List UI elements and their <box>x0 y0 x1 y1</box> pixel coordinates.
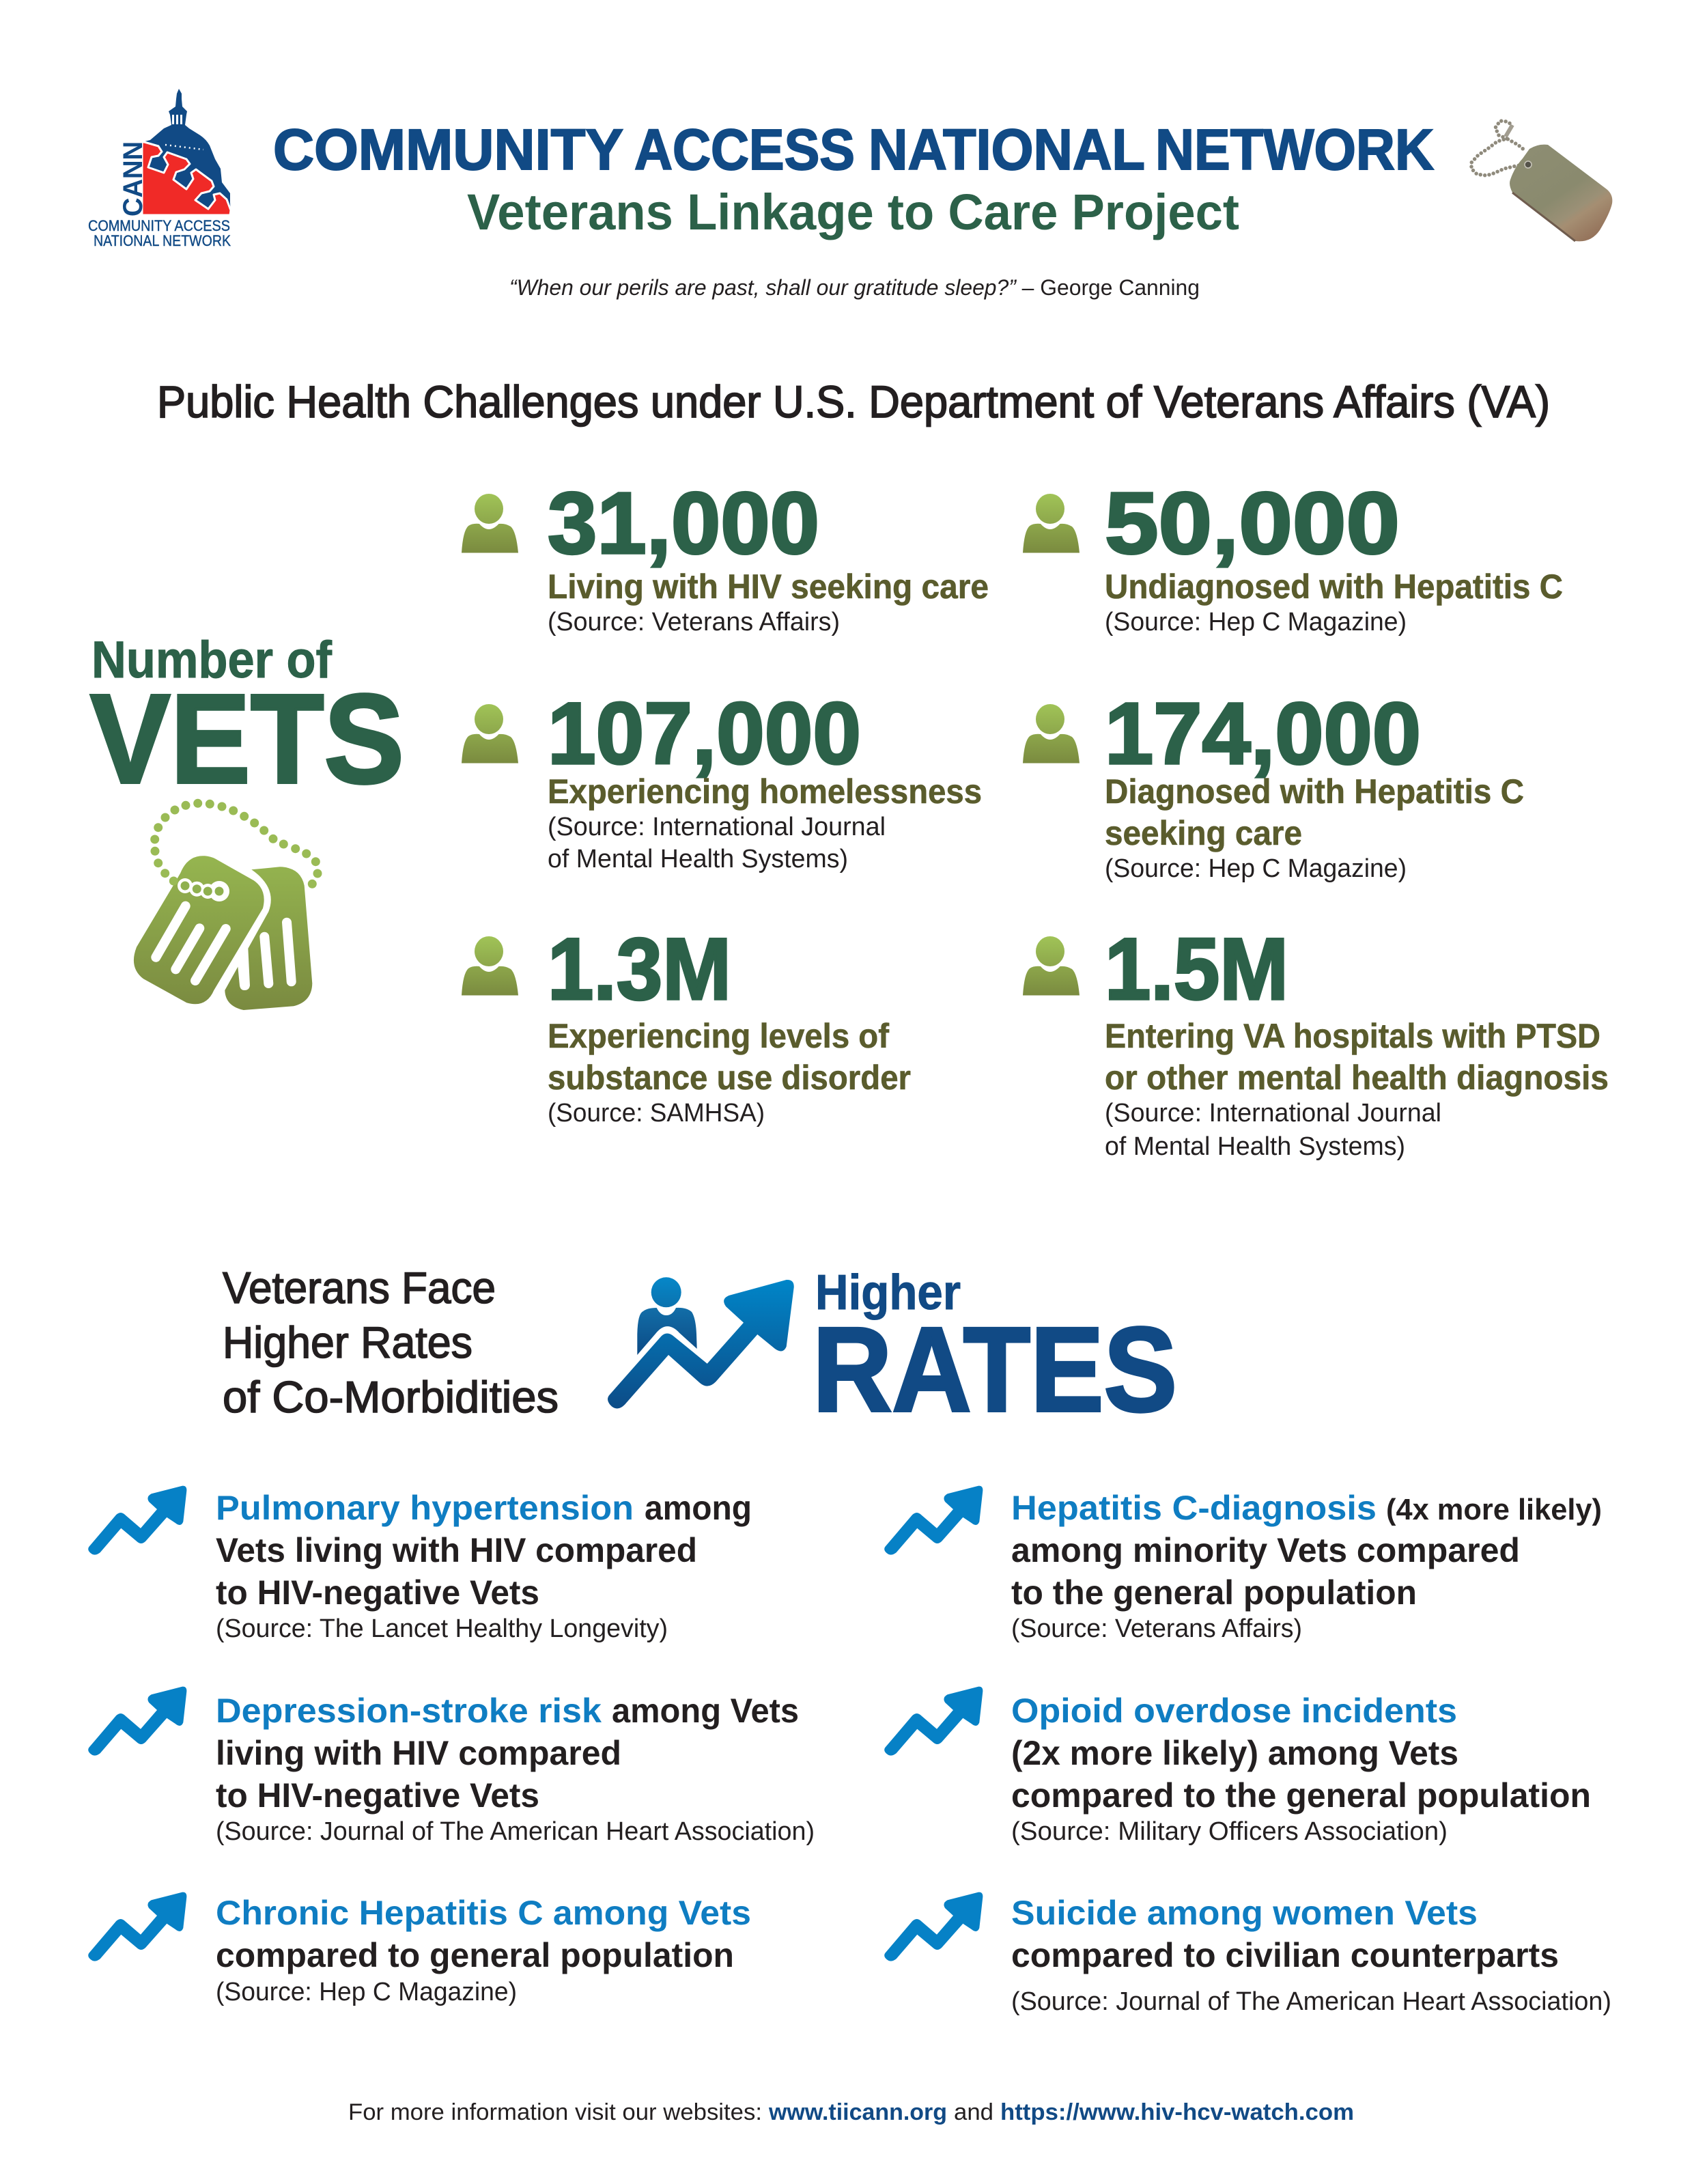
stat: 1.5M: (Source: International Journal <box>1105 1099 1441 1128</box>
stat: 174,000: seeking care <box>1105 814 1302 852</box>
title: NATIONAL <box>869 117 1145 182</box>
item: suicide among women vets <box>884 1892 1611 2016</box>
stat: 1.5M: 1.5M <box>1105 921 1288 1018</box>
stat: 1.5M: or other mental health diagnosis <box>1105 1059 1609 1097</box>
title: NETWORK <box>1155 117 1434 182</box>
item: pulmonary hypertension <box>88 1486 752 1643</box>
stat: 50,000 <box>1023 475 1563 636</box>
item: pulmonary hypertension: Pulmonary hypertension <box>216 1489 634 1527</box>
stat: 174,000: 174,000 <box>1105 685 1421 783</box>
icon: dog tag photo <box>1471 121 1612 241</box>
icon: rising arrow <box>88 1892 186 1961</box>
item: depression-stroke risk: living with HIV compared <box>216 1734 621 1772</box>
icon: rising arrow <box>88 1687 186 1756</box>
icon: dog tags <box>134 799 322 1010</box>
item: pulmonary hypertension: (Source: The Lancet Healthy Longevity) <box>216 1614 668 1643</box>
item: depression-stroke risk <box>88 1687 815 1846</box>
item: opioid overdose incidents <box>884 1687 1591 1846</box>
stat: 31,000: 31,000 <box>548 475 819 572</box>
icon: rising arrow <box>884 1486 983 1555</box>
item: opioid overdose incidents: (Source: Military Officers Association) <box>1011 1817 1448 1846</box>
item: opioid overdose incidents: (2x more likely) among Vets <box>1011 1734 1458 1772</box>
stat: 1.3M: 1.3M <box>548 921 731 1018</box>
stat: 1.5M: Entering VA hospitals with PTSD <box>1105 1017 1600 1055</box>
stat: 174,000 <box>1023 685 1524 883</box>
subtitle: Veterans Linkage to Care Project <box>467 184 1239 240</box>
heading: veterans face higher rates: Veterans Face <box>223 1263 496 1313</box>
heading: higher rates: RATES <box>813 1303 1177 1437</box>
icon: rising arrow <box>88 1486 186 1555</box>
heading: higher rates: Higher <box>815 1265 961 1320</box>
item: opioid overdose incidents: Opioid overdose incidents <box>1011 1692 1457 1730</box>
icon: person <box>462 936 518 996</box>
icon: person <box>1023 494 1080 553</box>
title: COMMUNITY <box>273 117 623 182</box>
stat: 174,000: Diagnosed with Hepatitis C <box>1105 772 1524 811</box>
item: suicide among women vets: compared to civilian counterparts <box>1011 1936 1559 1974</box>
stat: 1.3M <box>462 921 911 1128</box>
stat: 50,000: 50,000 <box>1105 475 1400 572</box>
title: ACCESS <box>634 117 855 182</box>
stat: 1.3M: substance use disorder <box>548 1059 911 1097</box>
footer: https://www.hiv-hcv-watch.com <box>1000 2099 1354 2125</box>
footer: and <box>954 2099 993 2125</box>
item: suicide among women vets: (Source: Journal of The American Heart Association) <box>1011 1987 1611 2016</box>
stat: 107,000: Experiencing homelessness <box>548 772 982 811</box>
item: depression-stroke risk: Depression-stroke risk <box>216 1692 602 1730</box>
item: chronic hepatitis c: compared to general population <box>216 1936 734 1974</box>
quote: “When our perils are past, shall our gratitude sleep?” – George Canning <box>509 275 1200 300</box>
item: hepatitis c-diagnosis: (4x more likely) <box>1386 1493 1602 1526</box>
stat: 31,000: Living with HIV seeking care <box>548 568 989 606</box>
icon: rising arrow <box>884 1892 983 1961</box>
heading: number of vets: VETS <box>90 669 404 810</box>
footer <box>348 2099 1354 2125</box>
logo: CANN <box>88 89 231 249</box>
stat: 1.3M: (Source: SAMHSA) <box>548 1099 765 1128</box>
item: opioid overdose incidents: compared to the general population <box>1011 1776 1591 1815</box>
item: hepatitis c-diagnosis: (Source: Veterans Affairs) <box>1011 1614 1302 1643</box>
stat: 50,000: Undiagnosed with Hepatitis C <box>1105 568 1563 606</box>
heading: veterans face higher rates: of Co-Morbidities <box>223 1372 559 1422</box>
item: chronic hepatitis c: Chronic Hepatitis C among Vets <box>216 1894 751 1932</box>
icon: person on rising arrow <box>608 1277 794 1408</box>
item: hepatitis c-diagnosis <box>884 1486 1602 1643</box>
item: hepatitis c-diagnosis: among minority Vets compared <box>1011 1531 1520 1569</box>
item: suicide among women vets: Suicide among women Vets <box>1011 1894 1478 1932</box>
item: hepatitis c-diagnosis: Hepatitis C-diagnosis <box>1011 1489 1377 1527</box>
stat: 107,000: (Source: International Journal <box>548 813 886 841</box>
icon: person <box>462 704 518 764</box>
stat: 107,000: 107,000 <box>548 685 861 783</box>
item: depression-stroke risk: to HIV-negative Vets <box>216 1776 539 1815</box>
item: depression-stroke risk: among Vets <box>612 1692 799 1730</box>
stat: 31,000: (Source: Veterans Affairs) <box>548 608 840 636</box>
logo: CANN: NATIONAL NETWORK <box>94 232 231 249</box>
icon: rising arrow <box>884 1687 983 1756</box>
heading: public health challenges: Public Health Challenges under U.S. Department of Veterans Affairs (VA) <box>157 376 1550 427</box>
title <box>273 117 1434 182</box>
stat: 1.5M <box>1023 921 1609 1161</box>
logo: CANN: CANN <box>118 141 148 216</box>
item: hepatitis c-diagnosis: to the general population <box>1011 1573 1417 1612</box>
stat: 1.3M: Experiencing levels of <box>548 1017 889 1055</box>
stat: 174,000: (Source: Hep C Magazine) <box>1105 854 1407 883</box>
item: depression-stroke risk: (Source: Journal of The American Heart Association) <box>216 1817 815 1846</box>
footer: For more information visit our websites: <box>348 2099 762 2125</box>
item: pulmonary hypertension: among <box>645 1489 752 1527</box>
stat: 1.5M: of Mental Health Systems) <box>1105 1132 1405 1161</box>
item: chronic hepatitis c <box>88 1892 751 2006</box>
stat: 107,000 <box>462 685 982 873</box>
stat: 31,000 <box>462 475 989 636</box>
icon: person <box>1023 936 1080 996</box>
footer: www.tiicann.org <box>768 2099 947 2125</box>
logo: CANN: COMMUNITY ACCESS <box>88 217 230 234</box>
item: chronic hepatitis c: (Source: Hep C Magazine) <box>216 1978 517 2006</box>
heading: veterans face higher rates <box>223 1263 559 1422</box>
icon: person <box>1023 704 1080 764</box>
item: pulmonary hypertension: Vets living with HIV compared <box>216 1531 697 1569</box>
item: pulmonary hypertension: to HIV-negative Vets <box>216 1573 539 1612</box>
heading: number of vets: Number of <box>91 631 333 689</box>
stat: 50,000: (Source: Hep C Magazine) <box>1105 608 1407 636</box>
stat: 107,000: of Mental Health Systems) <box>548 845 848 873</box>
icon: person <box>462 494 518 553</box>
heading: veterans face higher rates: Higher Rates <box>223 1317 472 1367</box>
